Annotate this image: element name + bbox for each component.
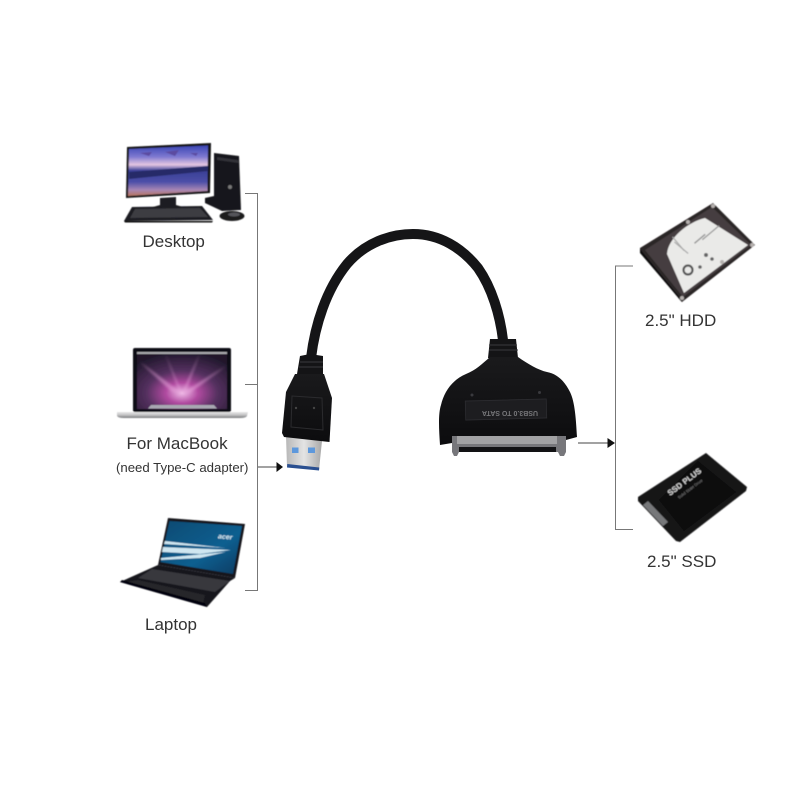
stand — [153, 197, 183, 207]
icon: desktop computer — [124, 143, 244, 222]
icon: 2.5 inch SSD: Solid State Drive — [677, 477, 704, 500]
icon: 2.5 inch HDD — [640, 203, 755, 302]
cable — [311, 234, 503, 358]
label: Laptop: Laptop — [145, 615, 197, 634]
mouse — [220, 211, 244, 221]
SATA body embossed label — [465, 399, 547, 420]
icon: MacBook — [117, 348, 248, 418]
USB plug metal — [286, 436, 322, 470]
monitor — [126, 143, 211, 198]
USB strain relief — [297, 354, 323, 374]
arrow: adapter to drives — [578, 438, 615, 448]
label: 2.5" SSD: 2.5" SSD — [647, 552, 716, 571]
SATA adapter body — [439, 357, 577, 445]
label: need Type-C adapter: (need Type-C adapter) — [116, 460, 248, 475]
icon: laptop: acer — [218, 533, 234, 542]
SATA body screws — [470, 394, 474, 396]
keyboard — [124, 206, 213, 221]
USB blue tip — [287, 464, 319, 470]
USB plug housing — [282, 374, 332, 442]
icon: 2.5 inch SSD: SSD PLUS — [666, 466, 704, 498]
SATA metal connector — [452, 432, 566, 456]
right bracket connector lines — [616, 266, 633, 530]
SATA body embossed label: USB3.0 TO SATA — [482, 409, 538, 416]
label: Desktop: Desktop — [142, 232, 205, 251]
left bracket connector lines — [245, 194, 258, 590]
SATA strain relief — [488, 339, 518, 358]
icon: 2.5 inch SSD — [638, 453, 747, 542]
label: For MacBook: For MacBook — [126, 434, 228, 453]
tower — [205, 153, 241, 211]
arrow: computers to USB plug — [258, 462, 283, 472]
USB to SATA adapter cable — [282, 234, 577, 470]
HDD silver label — [667, 218, 748, 293]
label: 2.5" HDD: 2.5" HDD — [645, 311, 716, 330]
USB blue contacts — [292, 448, 315, 453]
icon: laptop — [120, 518, 245, 607]
